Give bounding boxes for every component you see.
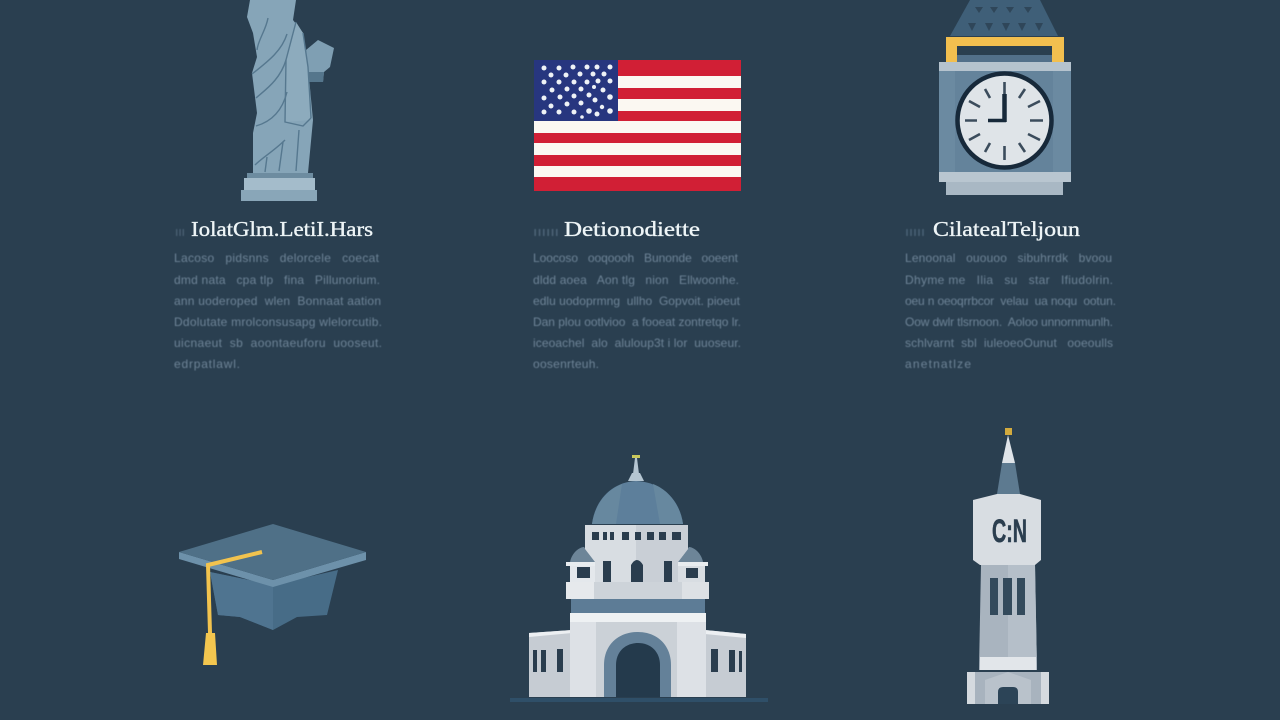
- heading: column 3: CilatealTeljoun: [933, 217, 1081, 241]
- statue tablet: [306, 40, 334, 82]
- spire lower: [997, 463, 1020, 494]
- text block: column 3: Lenoonal ououoo sibuhrrdk bvoou: [905, 251, 1112, 265]
- icon: graduation cap: [179, 524, 366, 665]
- tassel: [203, 633, 217, 665]
- text block: column 3: anetnatlze: [905, 357, 971, 371]
- text block: column 1: ann uoderoped wlen Bonnaat aation: [174, 294, 381, 308]
- blue band: [571, 599, 705, 613]
- heading: column 2: [533, 217, 700, 241]
- tower lower band: [939, 172, 1071, 182]
- text block: column 3: Oow dwlr tlsrnoon. Aoloo unnornmunlh.: [905, 315, 1113, 329]
- tower body: [939, 71, 1071, 172]
- flag red field: [534, 60, 741, 191]
- side dome right: [678, 547, 703, 562]
- centre windows: [603, 561, 611, 582]
- tower base: [967, 672, 1049, 704]
- flag white stripes: [534, 76, 741, 177]
- flag stars: [542, 64, 613, 119]
- ground shadow: [510, 698, 768, 702]
- icon: cn tower: [967, 428, 1049, 704]
- cap board edge: [179, 552, 366, 587]
- spire upper: [1002, 435, 1015, 463]
- text block: column 2: Loocoso ooqoooh Bunonde ooeent: [533, 251, 739, 265]
- text block: column 2: dldd aoea Aon tlg nion Ellwoonhe.: [533, 273, 739, 287]
- statue base upper: [244, 178, 315, 190]
- text block: column 1: uicnaeut sb aoontaeuforu uooseut.: [174, 336, 382, 350]
- text block: column 3: Dhyme me Ilia su star Ifiudolrin.: [905, 273, 1113, 287]
- statue drapery: [285, 22, 311, 122]
- text block: column 1: edrpatlawl.: [174, 357, 240, 371]
- clock hands: [1002, 94, 1007, 122]
- left wing: [529, 630, 572, 697]
- side dome left: [570, 547, 595, 562]
- balcony: [566, 582, 709, 599]
- shaft windows: [990, 578, 1025, 615]
- tower roof: [950, 0, 1058, 36]
- finial: [1005, 428, 1012, 435]
- tower sign: C:N: [992, 513, 1027, 549]
- statue robe: [247, 0, 313, 173]
- side pavilions: [570, 565, 595, 583]
- yellow frame: [946, 37, 1064, 62]
- icon: american flag: [534, 60, 741, 191]
- tower foot: [946, 182, 1063, 195]
- text block: column 2: Dan plou ootlvioo a fooeat zontretqo lr.: [533, 315, 741, 329]
- text block: column 3: [905, 251, 1116, 371]
- pavilion windows: [577, 567, 590, 578]
- statue base lower: [241, 190, 317, 201]
- shaft light band: [980, 657, 1036, 670]
- roof studs: [968, 7, 1043, 31]
- finial: [632, 455, 640, 458]
- drum windows: [592, 532, 681, 540]
- tower door: [998, 687, 1018, 704]
- clock ticks: [965, 82, 1043, 160]
- tower shaft: [979, 565, 1037, 670]
- heading: column 1: IolatGlm.LetiI.Hars: [191, 217, 373, 241]
- clock face: [958, 74, 1052, 168]
- text block: column 3: schlvarnt sbl iuleoeoOunut ooeoulls: [905, 336, 1113, 350]
- text block: column 2: [533, 251, 741, 371]
- wing windows: [533, 649, 742, 672]
- main arch: [604, 632, 671, 697]
- cap skull: [210, 570, 338, 630]
- tower head: [973, 494, 1041, 565]
- statue plinth: [247, 173, 313, 178]
- text block: column 1: Lacoso pidsnns delorcele coecat: [174, 251, 380, 265]
- drum: [585, 525, 688, 582]
- text block: column 1: [174, 251, 382, 371]
- main block: [570, 613, 706, 697]
- heading: column 2: Detionodiette: [564, 217, 700, 241]
- icon: capitol building: [510, 455, 768, 702]
- heading: column 3: IIIII: [905, 228, 925, 239]
- cap board top: [179, 524, 366, 580]
- frame interior: [957, 46, 1052, 55]
- text block: column 2: iceoachel alo aluloup3t i lor uuoseur.: [533, 336, 741, 350]
- text block: column 1: dmd nata cpa tlp fina Pillunorium.: [174, 273, 380, 287]
- text block: column 1: Ddolutate mrolconsusapg wlelorcutib.: [174, 315, 382, 329]
- flag canton: [534, 60, 618, 121]
- statue folds: [252, 18, 311, 172]
- side cornices: [566, 562, 595, 566]
- heading: column 2: IIIIII: [533, 228, 559, 239]
- right wing: [705, 630, 746, 697]
- icon: statue of liberty: [241, 0, 334, 201]
- text block: column 2: edlu uodoprmng ullho Gopvoit. pioeut: [533, 294, 741, 308]
- text block: column 3: oeu n oeoqrrbcor velau ua noqu ootun.: [905, 294, 1116, 308]
- tower cornice: [939, 62, 1071, 71]
- icon: clock tower: [939, 0, 1071, 195]
- heading: column 1: III: [175, 228, 185, 239]
- tassel cord: [208, 552, 262, 633]
- main dome: [592, 481, 683, 524]
- text block: column 2: oosenrteuh.: [533, 357, 599, 371]
